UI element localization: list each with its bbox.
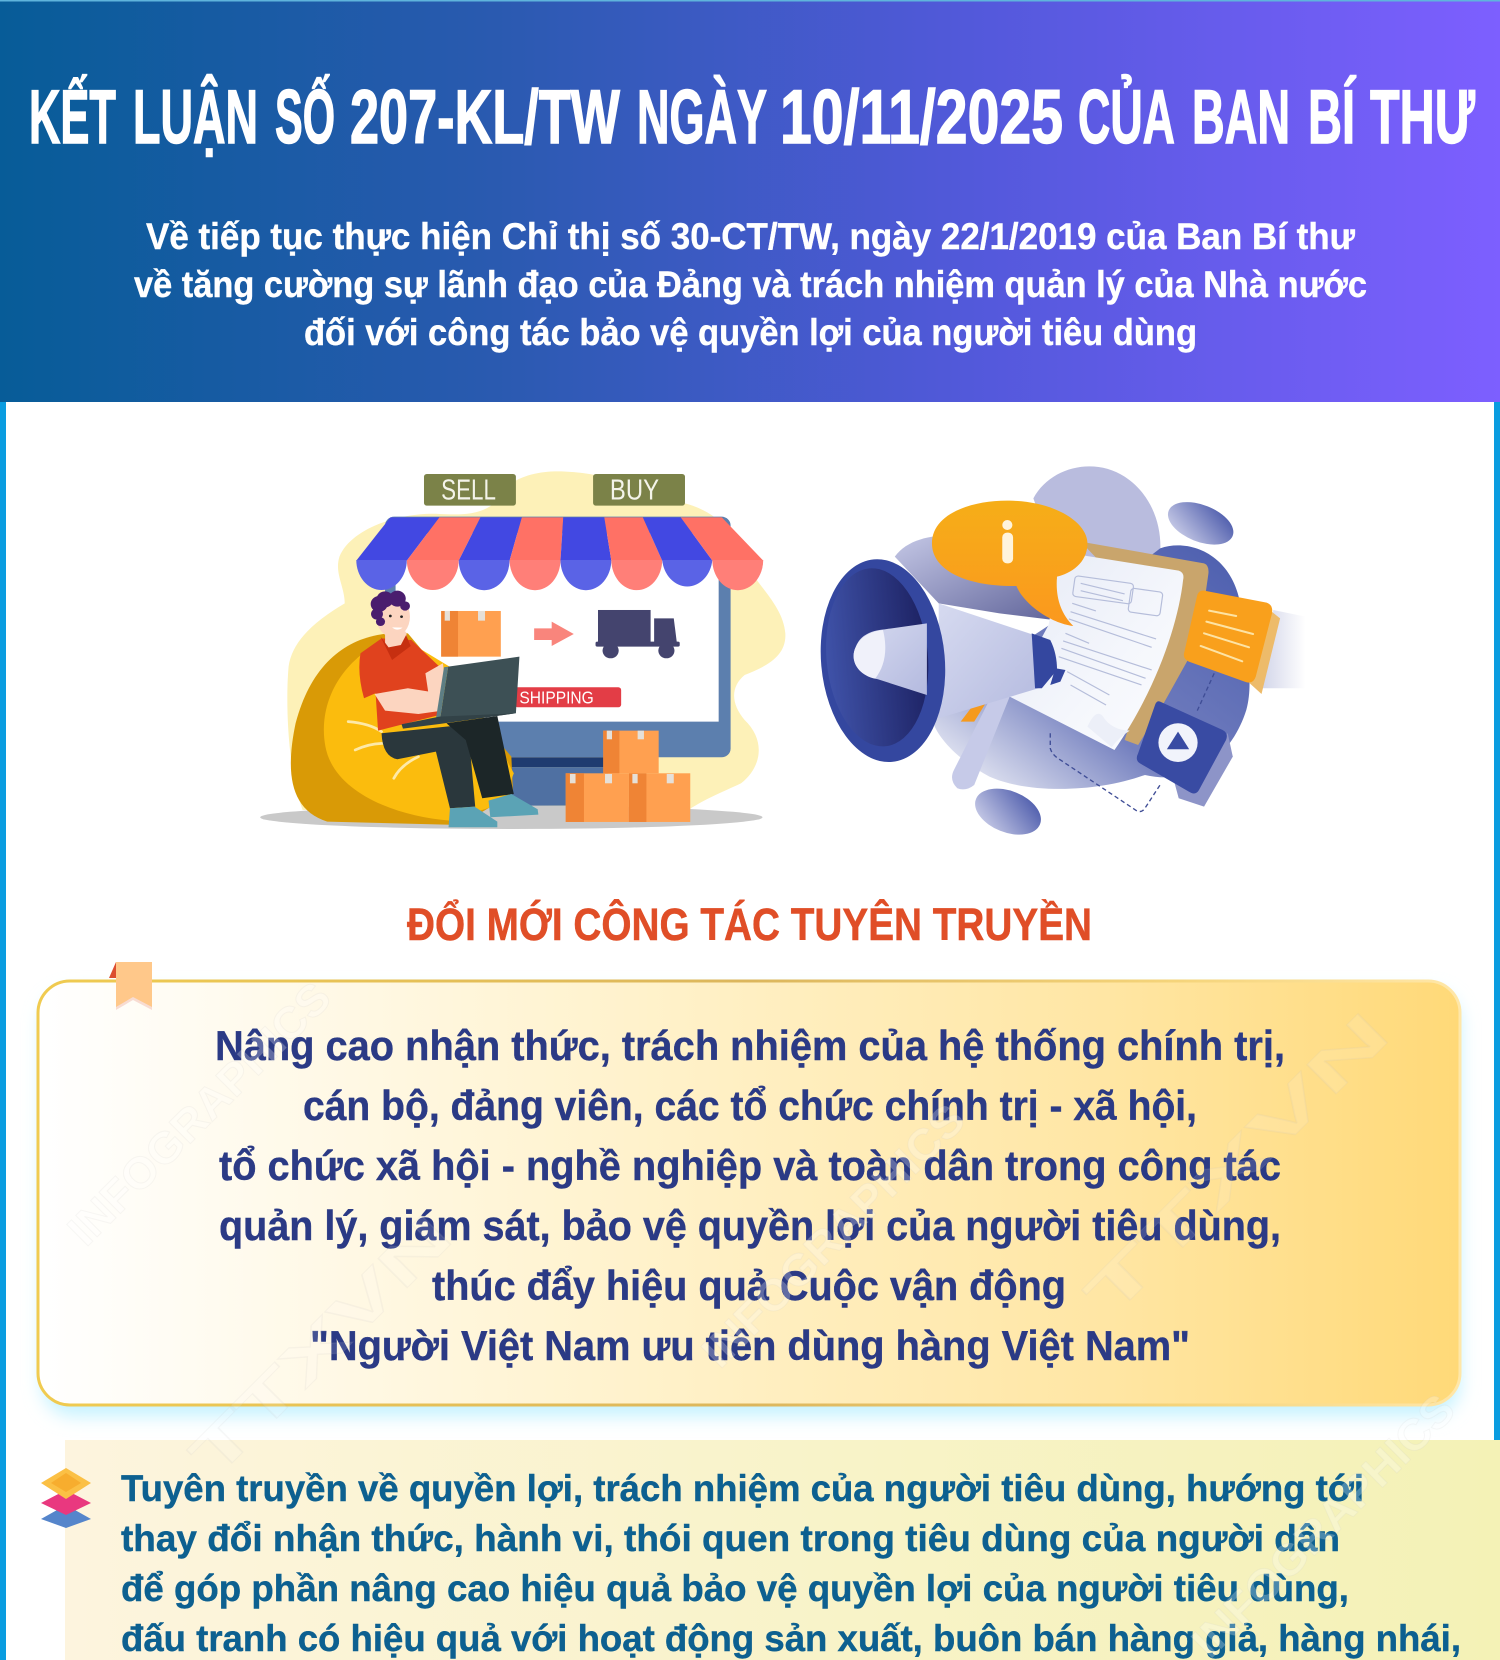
ground shadow	[260, 806, 763, 829]
title: SỐ	[275, 75, 335, 160]
folder	[1081, 542, 1209, 745]
title: 10/11/2025	[780, 75, 1063, 160]
title: KẾT	[29, 75, 116, 160]
title: CỦA	[1078, 75, 1175, 160]
title: 207-KL/TW	[350, 75, 620, 160]
subtitle: đối với công tác bảo vệ quyền lợi của người tiêu dùng	[304, 312, 1197, 353]
sign: sell: SELL	[441, 474, 496, 506]
panel text: để góp phần nâng cao hiệu quả bảo vệ quyền lợi của người tiêu dùng,	[121, 1568, 1349, 1609]
bookmark	[109, 962, 152, 1010]
speech bubble	[932, 501, 1087, 626]
callout card	[38, 962, 1460, 1416]
cream blob	[287, 471, 785, 810]
panel text: Tuyên truyền về quyền lợi, trách nhiệm của người tiêu dùng, hướng tới	[121, 1468, 1364, 1509]
watermarks	[58, 973, 1465, 1660]
header banner	[0, 0, 1500, 402]
watermarks: TTXVN	[177, 1201, 465, 1489]
title	[29, 74, 1476, 160]
bean bag	[291, 633, 514, 825]
laptop	[402, 657, 519, 729]
panel text	[121, 1468, 1461, 1659]
subtitle: Về tiếp tục thực hiện Chỉ thị số 30-CT/TW, ngày 22/1/2019 của Ban Bí thư	[146, 216, 1355, 257]
truck	[596, 610, 680, 658]
monitor	[385, 517, 731, 806]
watermarks: INFOGRAPHICS	[1182, 1385, 1465, 1660]
subtitle	[134, 216, 1367, 353]
panel text: thay đổi nhận thức, hành vi, thói quen trong tiêu dùng của người dân	[121, 1518, 1340, 1559]
card text	[215, 1022, 1285, 1369]
document	[1010, 555, 1183, 750]
title: LUẬN	[133, 74, 258, 160]
watermarks: INFOGRAPHICS	[692, 1095, 975, 1377]
megaphone	[812, 554, 1065, 789]
icon: layers	[41, 1468, 91, 1528]
shipping label: SHIPPING	[519, 687, 594, 708]
sticky note	[1184, 591, 1280, 694]
watermarks: TTXVN	[1072, 999, 1402, 1329]
fade stripe	[1262, 610, 1305, 688]
sign: buy	[593, 474, 685, 506]
stacked boxes	[566, 731, 690, 822]
play tag	[1137, 701, 1233, 807]
panel text: đấu tranh có hiệu quả với hoạt động sản xuất, buôn bán hàng giả, hàng nhái,	[121, 1618, 1461, 1659]
illustration: online shop	[260, 471, 785, 829]
card text: "Người Việt Nam ưu tiên dùng hàng Việt Nam"	[310, 1322, 1190, 1369]
awning	[356, 517, 763, 590]
person	[359, 591, 538, 827]
screen parcel	[441, 611, 501, 657]
title: BÍ	[1308, 75, 1356, 160]
subtitle: về tăng cường sự lãnh đạo của Đảng và trách nhiệm quản lý của Nhà nước	[134, 264, 1367, 305]
background blobs	[895, 466, 1250, 844]
sign: buy: BUY	[610, 474, 659, 506]
bottom panel	[41, 1440, 1500, 1660]
card text: tổ chức xã hội - nghề nghiệp và toàn dân trong công tác	[219, 1142, 1281, 1189]
page side borders	[0, 400, 1500, 1660]
card text: thúc đẩy hiệu quả Cuộc vận động	[432, 1262, 1066, 1309]
illustration: megaphone	[812, 466, 1305, 844]
title: BAN	[1192, 75, 1290, 160]
arrow	[534, 622, 574, 646]
section heading: ĐỔI MỚI CÔNG TÁC TUYÊN TRUYỀN	[407, 899, 1092, 950]
watermarks: INFOGRAPHICS	[58, 973, 341, 1255]
dashed line	[1050, 673, 1214, 812]
card text: quản lý, giám sát, bảo vệ quyền lợi của người tiêu dùng,	[219, 1202, 1281, 1249]
title: NGÀY	[637, 75, 767, 160]
card text: cán bộ, đảng viên, các tổ chức chính trị - xã hội,	[303, 1082, 1197, 1129]
card text: Nâng cao nhận thức, trách nhiệm của hệ thống chính trị,	[215, 1022, 1285, 1069]
